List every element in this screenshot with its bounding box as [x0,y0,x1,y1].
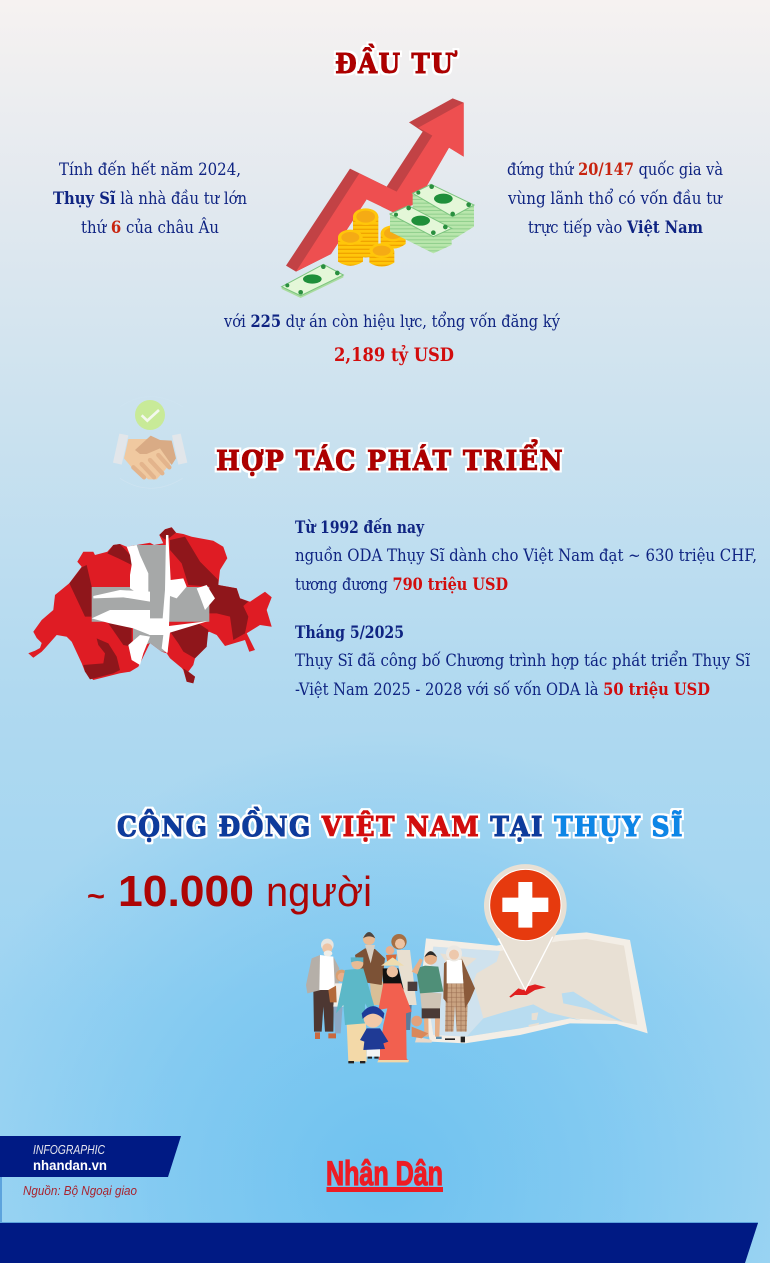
text block: projects and capital: với 225 dự án còn hiệu lực, tổng vốn đăng ký [223,312,561,331]
paper map [420,932,648,1043]
father in brown jacket [355,932,385,1005]
coin stacks [338,208,406,267]
cash stacks [390,184,474,253]
map: switzerland with flag [28,527,272,683]
statistic: 10.000 people [87,867,372,916]
statistic: 10.000 people: 10.000 [118,867,254,916]
text block: left investment rank: thứ 6 của châu Âu [81,217,219,237]
text block: projects and capital [223,312,561,366]
footer tag: infographic nhandan.vn: INFOGRAPHIC [33,1143,106,1157]
text block: right ranking: đứng thứ 20/147 quốc gia và [507,160,723,179]
family group [306,932,475,1063]
grandfather [306,939,339,1039]
statistic: 10.000 people: ~ [87,880,105,913]
text block: oda since 1992 [295,518,757,594]
woman in red ao dai [377,957,412,1062]
grandmother [443,945,475,1042]
footer tag: infographic nhandan.vn [0,1136,181,1177]
source credit: Nguồn: Bộ Ngoại giao [23,1183,137,1198]
text block: right ranking [507,160,723,237]
heading: hợp tác phát triển: HỢP TÁC PHÁT TRIỂN [216,438,564,477]
footer band [0,1223,758,1263]
statistic: 10.000 people: người [266,868,372,915]
boy in green shirt [412,951,443,1039]
text block: oda programme 2025: Tháng 5/2025 [295,623,404,642]
footer panel: source frame [1,1177,758,1223]
single banknote [282,264,343,298]
man in teal tunic [336,957,375,1063]
text block: oda programme 2025: -Việt Nam 2025 - 2028 với số vốn ODA là 50 triệu USD [295,680,710,699]
text block: oda since 1992: Từ 1992 đến nay [295,518,424,537]
icon: handshake [113,397,187,488]
heading: cộng đồng việt nam tại thụy sĩ: CỘNG ĐỒNG VIỆT NAM TẠI THỤY SĨ [117,806,684,843]
illustration: map with location pin [306,864,648,1063]
text block: oda programme 2025 [295,623,751,699]
text block: oda since 1992: tương đương 790 triệu USD [295,575,508,594]
boy in blue robe [360,1006,388,1059]
text block: right ranking: trực tiếp vào Việt Nam [528,218,703,237]
heading: đầu tư: ĐẦU TƯ [335,43,458,80]
logo: nhân dân: Nhân Dân [326,1155,443,1193]
text block: left investment rank [53,160,247,237]
text block: projects and capital: 2,189 tỷ USD [334,344,454,366]
child with jeans [328,970,348,1033]
mother with baby [386,934,417,1030]
icon: rising arrow with money [282,98,474,298]
arrow [286,98,464,272]
location pin with swiss flag [484,864,567,990]
text block: left investment rank: Thụy Sĩ là nhà đầu tư lớn [53,189,247,208]
text block: left investment rank: Tính đến hết năm 2024, [59,160,241,179]
text block: right ranking: vùng lãnh thổ có vốn đầu tư [507,189,723,208]
footer tag: infographic nhandan.vn: nhandan.vn [33,1158,107,1173]
baby sitting [411,1016,432,1043]
